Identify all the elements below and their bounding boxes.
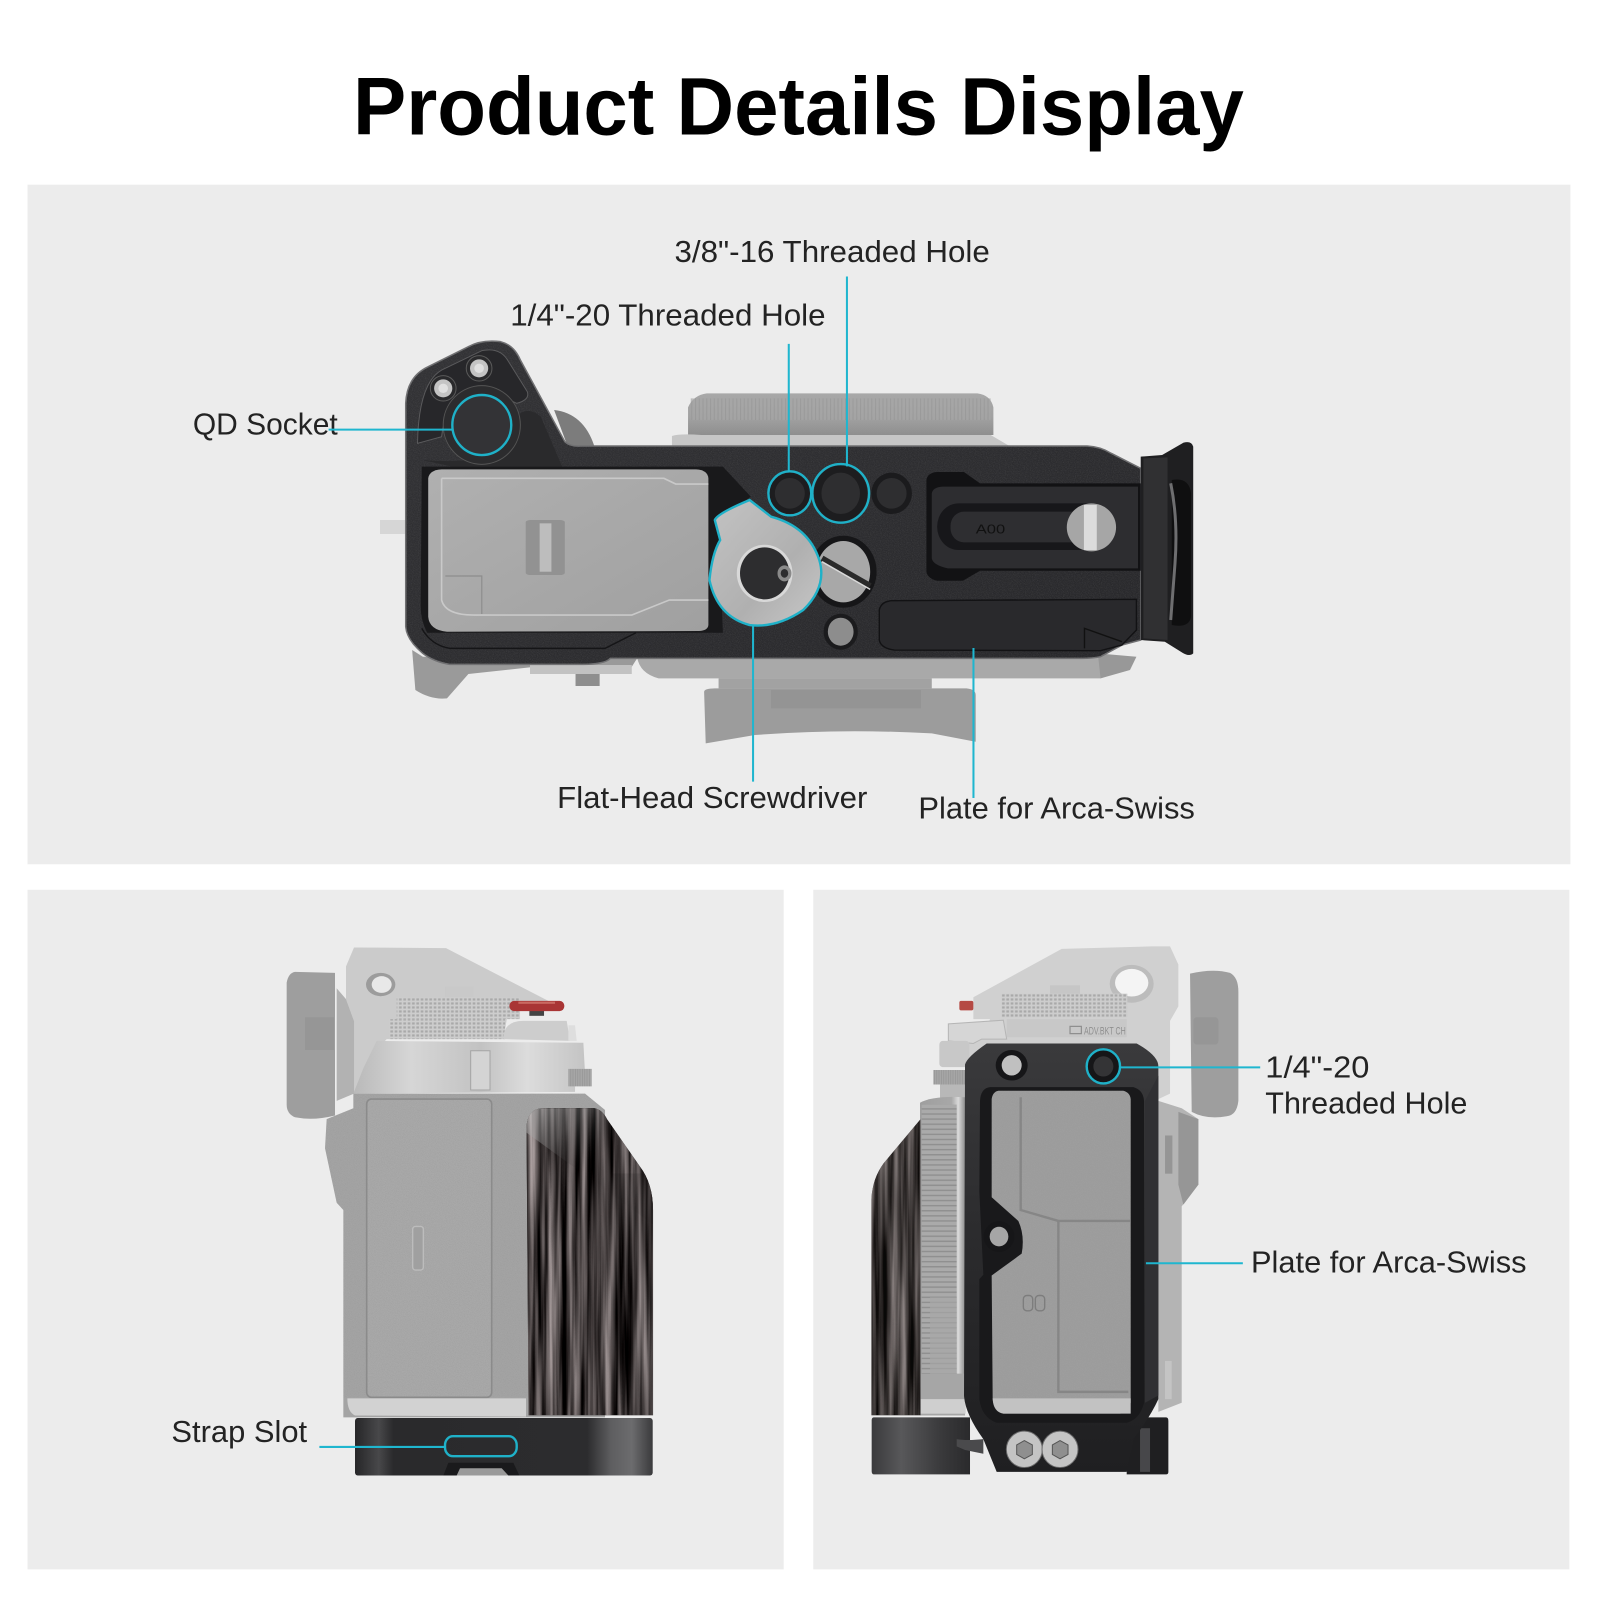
socket: small screw B: [466, 356, 492, 381]
center threaded hole: [984, 1221, 1014, 1252]
panel: rear view with L-bracket: [813, 890, 1569, 1569]
dial engraving: ADV.BKT CH: [1084, 1026, 1126, 1038]
base: [872, 1417, 970, 1474]
left silver stack: [948, 1020, 1007, 1043]
title: Product Details Display: [353, 62, 1244, 153]
leather body: [325, 1094, 605, 1417]
strap slot: [445, 1436, 517, 1456]
cage base plate: [406, 341, 1141, 664]
horn recess: [418, 350, 528, 443]
panel: side view with wooden grip: [28, 890, 784, 1569]
slider engraving: A00: [976, 521, 1005, 536]
QD socket: [443, 386, 520, 464]
silver deck: [353, 1041, 585, 1094]
spare threaded hole: [871, 473, 912, 514]
side plate bracket: [964, 1043, 1158, 1472]
red button: [959, 1001, 973, 1010]
red shutter button: [509, 1001, 564, 1016]
dial knob: [1110, 965, 1154, 1003]
locating hole: [824, 614, 858, 650]
callout: plate for Arca-Swiss: Plate for Arca-Swiss: [1251, 1246, 1527, 1279]
exposure dial: [1002, 994, 1127, 1017]
battery door: [428, 469, 708, 632]
3/8"-16 threaded hole: [812, 464, 869, 523]
callout: 1/4"-20 threaded hole: Threaded Hole: [1265, 1087, 1467, 1120]
panel: top view: [28, 185, 1570, 864]
leather window: [992, 1091, 1131, 1414]
left threaded hole: [996, 1050, 1028, 1081]
dial: [445, 986, 473, 997]
callout: 1/4"-20 threaded hole: [1119, 1052, 1467, 1120]
eyecup: [1141, 442, 1193, 655]
right-side body: [1158, 1101, 1198, 1412]
top housing: [967, 946, 1178, 1099]
product: camera with wood grip: [287, 947, 657, 1476]
camera body behind plate: [380, 393, 1136, 743]
eyecup: [1190, 971, 1238, 1117]
callout: 1/4"-20 threaded hole: 1/4"-20 Threaded Hole: [510, 300, 826, 333]
callout: strap slot: Strap Slot: [171, 1416, 308, 1449]
callout: plate for Arca-Swiss: Plate for Arca-Swiss: [918, 792, 1195, 825]
flat-head screwdriver disc: [709, 500, 821, 626]
wood grip: [871, 1120, 920, 1416]
grip base with strap slot: [355, 1418, 653, 1476]
flat-head screw: [810, 536, 877, 608]
socket: small screw A: [430, 376, 456, 401]
1/4"-20 threaded hole: [1087, 1049, 1120, 1083]
eyecup: [287, 972, 335, 1119]
callout: 1/4"-20 threaded hole: 1/4"-20: [1265, 1052, 1369, 1085]
callout: 3/8"-16 threaded hole: 3/8"-16 Threaded Hole: [674, 236, 990, 269]
lens: [920, 1097, 965, 1416]
slider slot: [926, 472, 1141, 581]
lower plate for Arca-Swiss: [879, 599, 1136, 651]
product: top view of camera cage: [380, 341, 1193, 743]
1/4"-20 threaded hole: [768, 471, 811, 515]
product: camera with side plate: [867, 946, 1238, 1474]
callout: flat-head screwdriver: Flat-Head Screwdriver: [557, 782, 867, 815]
silver bolts: [1006, 1431, 1078, 1468]
callout: QD socket: QD Socket: [193, 409, 338, 442]
wood grip: [522, 1104, 657, 1418]
viewfinder housing: [346, 947, 548, 1094]
